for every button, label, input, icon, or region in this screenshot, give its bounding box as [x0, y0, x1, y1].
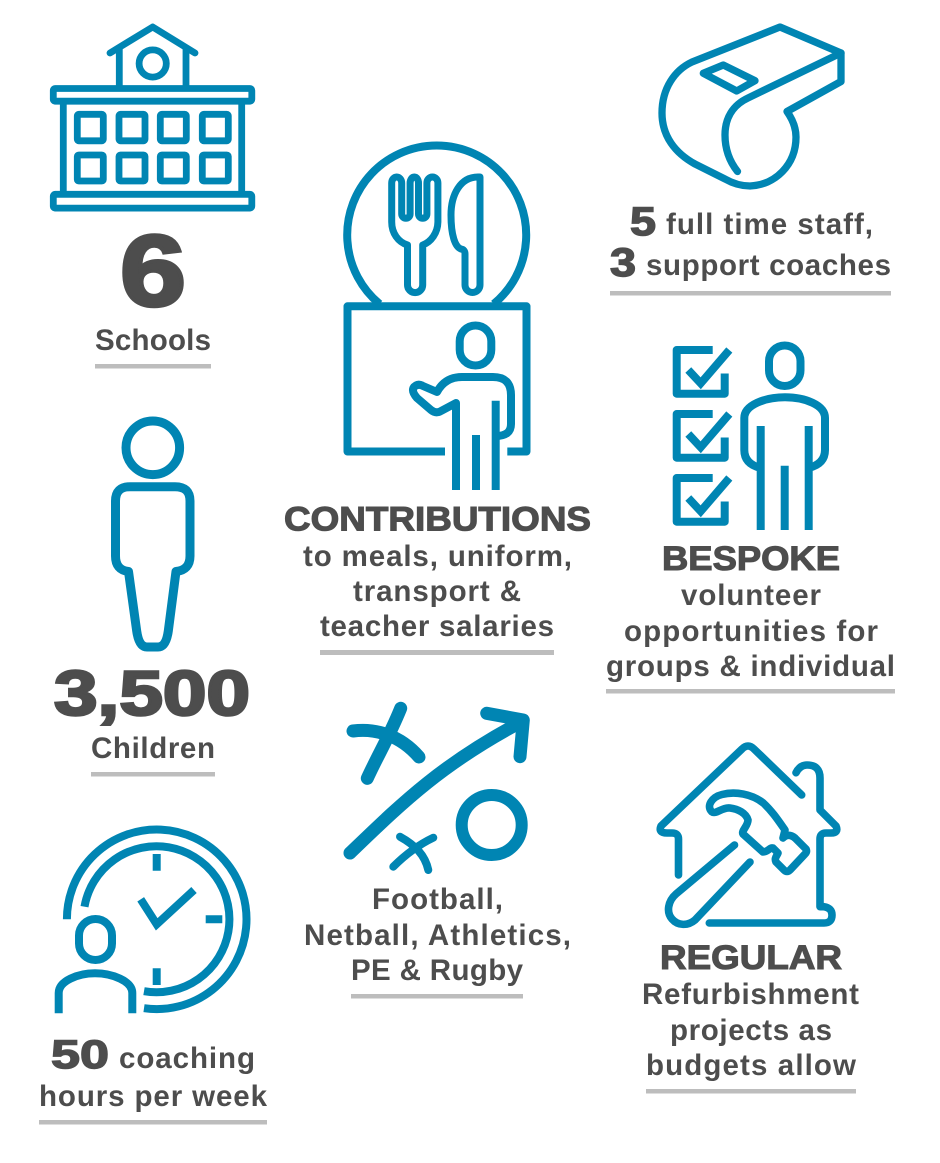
- number: 6: 6: [120, 216, 186, 328]
- heading: CONTRIBUTIONS: CONTRIBUTIONS: [284, 500, 591, 538]
- text: volunteering description: opportunities for: [624, 615, 879, 648]
- text: volunteering description: volunteer: [681, 579, 822, 612]
- label: Schools: Schools: [95, 324, 211, 357]
- text: 50 coaching hours per week: coaching: [119, 1042, 255, 1075]
- underline: [39, 1120, 267, 1124]
- icon: house and hammer: [660, 746, 837, 924]
- panel: schools: [53, 27, 252, 368]
- text: 50 coaching hours per week: hours per week: [39, 1080, 268, 1113]
- underline: [646, 1089, 856, 1094]
- text: contributions description: to meals, uniform,: [303, 540, 572, 573]
- panel: children: [54, 421, 250, 776]
- underline: [320, 650, 554, 655]
- panel: refurbishment: [642, 746, 859, 1094]
- icon: meals and teacher: [347, 145, 526, 490]
- text: sports list: Netball, Athletics,: [304, 919, 571, 952]
- underline: [606, 689, 895, 694]
- panel: staff: [610, 27, 891, 296]
- text: staff numbers: full time staff,: [666, 208, 873, 241]
- icon: school building: [53, 27, 252, 208]
- text: refurbishment description: budgets allow: [646, 1049, 856, 1082]
- text: sports list: [304, 883, 571, 987]
- underline: [91, 772, 215, 776]
- text: contributions description: teacher salaries: [320, 610, 554, 643]
- heading: REGULAR: REGULAR: [660, 939, 842, 977]
- text: staff numbers: 3: [610, 241, 636, 285]
- underline: [610, 291, 891, 296]
- text: volunteering description: groups & individual: [606, 650, 895, 683]
- icon: checklist and person: [677, 346, 825, 530]
- text: 50 coaching hours per week: [39, 1033, 268, 1113]
- icon: clock with person: [59, 830, 247, 1013]
- underline: [351, 994, 523, 998]
- text: refurbishment description: [642, 978, 859, 1082]
- text: refurbishment description: Refurbishment: [642, 978, 859, 1011]
- text: sports list: PE & Rugby: [351, 954, 524, 987]
- text: staff numbers: [610, 200, 891, 285]
- text: contributions description: transport &: [353, 575, 521, 608]
- heading: BESPOKE: BESPOKE: [662, 540, 840, 578]
- icon: whistle: [662, 27, 841, 186]
- text: contributions description: [303, 540, 572, 643]
- panel: contributions: [284, 145, 591, 655]
- panel: coaching hours: [39, 830, 268, 1124]
- panel: volunteering: [606, 346, 895, 694]
- text: refurbishment description: projects as: [670, 1014, 832, 1047]
- text: 50 coaching hours per week: 50: [51, 1033, 109, 1077]
- text: staff numbers: 5: [630, 200, 656, 244]
- panel: sports: [304, 708, 571, 998]
- text: sports list: Football,: [372, 883, 503, 916]
- number: 3,500: 3,500: [54, 659, 250, 729]
- text: volunteering description: [606, 579, 895, 683]
- text: staff numbers: support coaches: [646, 249, 891, 282]
- icon: child: [116, 421, 190, 647]
- icon: tactics play: [350, 708, 523, 870]
- label: Children: Children: [91, 732, 215, 765]
- underline: [95, 364, 211, 368]
